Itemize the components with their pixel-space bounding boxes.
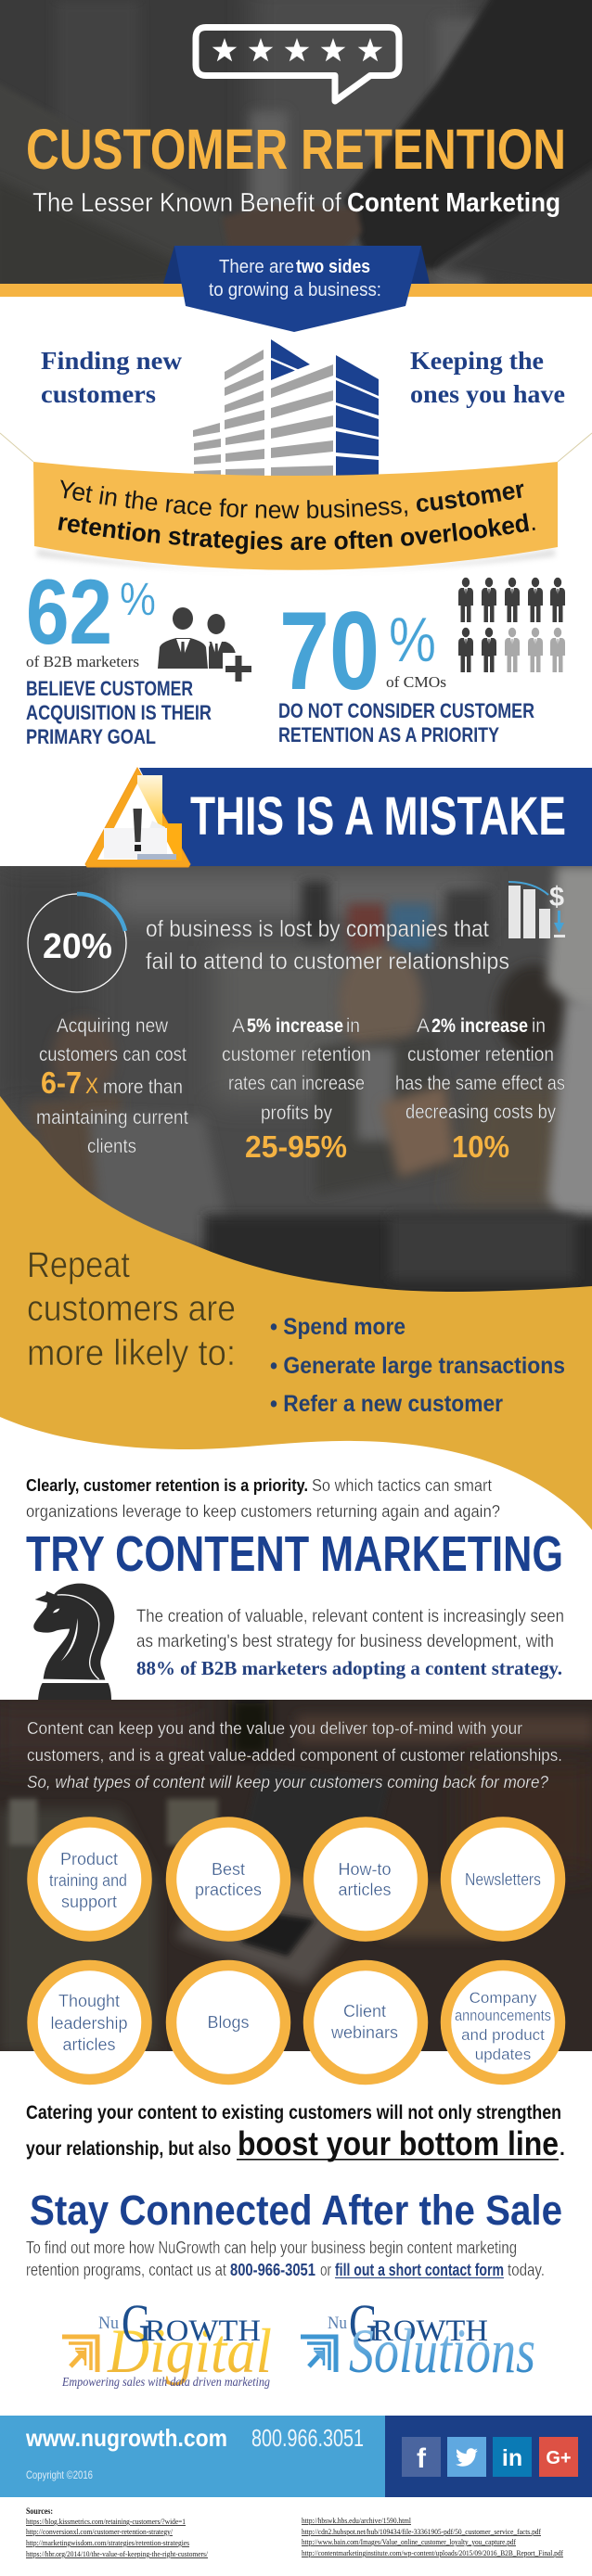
logo: NuGrowth Digital (61, 2293, 272, 2390)
logo: NuGrowth Digital: G (122, 2293, 151, 2353)
content type: how-to articles: articles (338, 1881, 392, 1899)
sources list: Sources: (26, 2506, 53, 2516)
text block: content strategy: 88% of B2B marketers adopting a content strategy. (136, 1657, 562, 1679)
content type: product training and support: Product (60, 1850, 118, 1868)
content type: company announcements: updates (475, 2046, 531, 2063)
text block: acquiring new customers: customers can cost (39, 1044, 187, 1065)
text block: contact details: retention programs, contact us at (26, 2261, 226, 2279)
panel: yellow curved section (0, 1096, 592, 1530)
subtitle: The Lesser Known Benefit of (32, 188, 342, 218)
text block: 5 percent increase: in (346, 1015, 360, 1037)
text block: acquiring new customers: 6-7 (41, 1065, 82, 1100)
sources list: http://conversionxl.com/customer-retention-strategy/ (26, 2527, 174, 2536)
text block: contact details: 800-966-3051 (230, 2261, 315, 2279)
stat: 70 percent: of CMOs (386, 673, 446, 691)
content type: blogs (171, 1966, 286, 2079)
subtitle: Content Marketing (347, 188, 560, 218)
text block: boost your bottom line: . (560, 2138, 565, 2160)
content type: best practices (171, 1822, 286, 1936)
content type: product training and support: support (61, 1893, 117, 1911)
callout: two sides ribbon (163, 246, 430, 332)
content type: product training and support: training and (49, 1871, 127, 1890)
text block: 5 percent increase (222, 1015, 371, 1164)
text block: 5 percent increase: 5% increase (247, 1015, 343, 1037)
content type: client webinars (308, 1966, 423, 2079)
heading: keeping the ones you have (410, 347, 565, 408)
text block: tactics question: Clearly, customer retention is a priority. (26, 1476, 308, 1495)
icon: business people with plus (158, 607, 254, 684)
icon: facebook: f (417, 2443, 427, 2474)
text block: 2 percent increase: has the same effect as (395, 1073, 565, 1094)
icon: declining revenue bars: $ (549, 882, 564, 912)
text block: 5 percent increase: 25-95% (245, 1129, 347, 1164)
icon: linkedin: in (502, 2445, 522, 2471)
stat: 70 percent: RETENTION AS A PRIORITY (278, 723, 499, 746)
heading: keeping the ones you have: Keeping the (410, 347, 544, 375)
stat: 20 percent of business lost (28, 894, 509, 992)
subtitle (32, 188, 560, 218)
icon: chess knight (33, 1584, 114, 1700)
content type: client webinars: webinars (330, 2023, 398, 2042)
heading: finding new customers: customers (41, 380, 156, 408)
content type: company announcements (445, 1966, 560, 2079)
content type: how-to articles (308, 1822, 423, 1936)
icon: warning triangle (85, 768, 190, 867)
text block: boost your bottom line: boost your bottom line (238, 2124, 559, 2162)
icon: google plus: G+ (546, 2448, 572, 2468)
text block: 2 percent increase: A (417, 1015, 430, 1037)
panel: hero header with handshake photo (0, 0, 592, 297)
content type: newsletters (445, 1822, 560, 1936)
sources list: http://marketingwisdom.com/strategies/retention-strategies (26, 2538, 189, 2547)
content type: company announcements: Company (470, 1989, 537, 2007)
logo: NuGrowth Digital: Digital (107, 2315, 272, 2386)
divider band: yellow (0, 284, 592, 297)
content type: product training and support (32, 1822, 147, 1936)
content type: how-to articles: How-to (338, 1860, 392, 1879)
stat: 20 percent of business lost: 20% (43, 927, 112, 966)
banner: this is a mistake (139, 768, 592, 866)
text block: tactics question: organizations leverage to keep customers returning again and again? (26, 1502, 500, 1521)
stat: 20 percent of business lost: of business is lost by companies that (146, 916, 489, 942)
text block: 5 percent increase: profits by (261, 1103, 332, 1124)
content type: thought leadership articles: leadership (50, 2014, 128, 2033)
text block: acquiring new customers (36, 1015, 188, 1157)
logo: NuGrowth Solutions: G (349, 2293, 379, 2353)
text block: 2 percent increase: in (532, 1015, 546, 1037)
text block: 5 percent increase: customer retention (222, 1044, 371, 1065)
sources list: http://www.bain.com/Images/Value_online_customer_loyalty_you_capture.pdf (302, 2537, 516, 2546)
text block: 5 percent increase: rates can increase (228, 1073, 365, 1094)
content type: company announcements: and product (461, 2026, 545, 2044)
text block: 2 percent increase: decreasing costs by (405, 1102, 556, 1123)
footer bar (0, 2416, 592, 2497)
stat: 62 percent: 62 (26, 560, 112, 663)
logo: NuGrowth Digital: ROWTH (145, 2315, 261, 2348)
banner: overlooked retention strategies: retention strategies are often overlooked. (58, 513, 535, 555)
sources list: http://hbswk.hbs.edu/archive/1590.html (302, 2516, 412, 2525)
text block: contact details: fill out a short contact form (335, 2261, 504, 2279)
logo: NuGrowth Solutions (301, 2293, 535, 2386)
content type: best practices: practices (195, 1881, 262, 1899)
text block: 2 percent increase: customer retention (407, 1044, 554, 1065)
icon: linkedin (493, 2437, 532, 2477)
list: repeat customer benefits: • Generate large transactions (270, 1353, 565, 1379)
text block: 2 percent increase: 10% (452, 1129, 509, 1164)
stat: 62 percent: BELIEVE CUSTOMER (26, 677, 193, 700)
heading: finding new customers: Finding new (41, 347, 183, 375)
icon: twitter (447, 2437, 486, 2477)
stat: 62 percent: of B2B marketers (26, 653, 139, 670)
text block: 5 percent increase: A (232, 1015, 245, 1037)
text block: content value intro: So, what types of content will keep your customers coming back for more? (27, 1772, 549, 1792)
banner: overlooked retention strategies: Yet in the race for new business, customer (60, 480, 523, 519)
text block: contact details: or (320, 2261, 331, 2279)
text block: content value intro (27, 1718, 562, 1792)
logo: NuGrowth Solutions: Solutions (349, 2315, 535, 2386)
text block: contact details: today. (508, 2261, 545, 2279)
text block: tactics question (26, 1476, 500, 1521)
heading: repeat customers: more likely to: (27, 1333, 236, 1373)
content type: thought leadership articles: articles (62, 2035, 116, 2054)
logo: NuGrowth Digital: Nu (98, 2314, 119, 2333)
stat: 70 percent: 70 (279, 589, 380, 713)
sources list: https://hbr.org/2014/10/the-value-of-keeping-the-right-customers/ (26, 2549, 209, 2558)
callout: two sides ribbon: two sides (296, 257, 370, 277)
sources list (26, 2506, 563, 2558)
logo: NuGrowth Digital: Empowering sales with data driven marketing (61, 2376, 270, 2390)
icon: review speech bubble with five stars (196, 28, 399, 101)
stat: 62 percent: % (120, 573, 156, 625)
list: repeat customer benefits: • Spend more (270, 1314, 405, 1340)
footer bar: 800.966.3051 (251, 2424, 364, 2452)
text block: 2 percent increase (395, 1015, 565, 1164)
banner: overlooked retention strategies (0, 432, 592, 592)
heading: keeping the ones you have: ones you have (410, 380, 565, 408)
text block: tactics question: So which tactics can smart (312, 1476, 492, 1495)
icon: office building (193, 339, 379, 478)
text block: acquiring new customers: more than (103, 1077, 183, 1098)
logo: NuGrowth Solutions: Nu (328, 2314, 347, 2333)
content type: newsletters: Newsletters (465, 1870, 541, 1889)
content type: blogs: Blogs (207, 2013, 250, 2032)
content type: client webinars: Client (343, 2002, 386, 2021)
sources list: https://blog.kissmetrics.com/retaining-customers/?wide=1 (26, 2517, 186, 2526)
callout: two sides ribbon: to growing a business: (209, 280, 381, 300)
text block: content value intro: Content can keep you and the value you deliver top-of-mind with your (27, 1718, 522, 1738)
heading: repeat customers (27, 1245, 236, 1373)
icon: ten people, seven dark (458, 578, 565, 672)
stat: 62 percent (26, 560, 254, 748)
heading: repeat customers: customers are (27, 1289, 236, 1329)
list: repeat customer benefits (270, 1314, 565, 1417)
text block: acquiring new customers: X (85, 1074, 98, 1099)
logo: NuGrowth Solutions: ROWTH (372, 2315, 488, 2348)
stat: 70 percent: % (389, 605, 436, 675)
content type: company announcements: announcements (455, 2007, 551, 2024)
text block: content value intro: customers, and is a great value-added component of customer relationships. (27, 1745, 562, 1765)
callout: two sides ribbon: There are (219, 257, 294, 277)
icon: google plus (539, 2437, 578, 2477)
stat: 62 percent: ACQUISITION IS THEIR (26, 701, 212, 724)
text block: acquiring new customers: Acquiring new (57, 1015, 169, 1037)
heading: repeat customers: Repeat (27, 1245, 130, 1285)
heading: finding new customers (41, 347, 183, 408)
icon: facebook (402, 2437, 441, 2477)
panel: desk photo section (0, 1700, 592, 2051)
stat: 20 percent of business lost: fail to attend to customer relationships (146, 949, 509, 975)
sources list: http://cdn2.hubspot.net/hub/109434/file-33361905-pdf/50_customer_service_facts.pdf (302, 2527, 541, 2536)
list: repeat customer benefits: • Refer a new customer (270, 1391, 503, 1417)
text block: 2 percent increase: 2% increase (431, 1015, 528, 1037)
icon: declining revenue bars (508, 882, 565, 938)
text block: boost your bottom line: your relationship, but also (26, 2138, 231, 2160)
footer bar: Copyright ©2016 (26, 2468, 93, 2481)
panel: office handshake photo with statistics background (0, 866, 592, 1307)
text block: boost your bottom line (26, 2102, 565, 2162)
text block: acquiring new customers: clients (87, 1136, 136, 1157)
content type: thought leadership articles: Thought (58, 1992, 120, 2010)
content type: thought leadership articles (32, 1966, 147, 2079)
text block: acquiring new customers: maintaining current (36, 1107, 188, 1129)
footer bar: www.nugrowth.com (25, 2424, 227, 2452)
text block: contact details (26, 2238, 545, 2279)
stat: 70 percent: DO NOT CONSIDER CUSTOMER (278, 699, 534, 722)
stat: 70 percent (278, 578, 565, 746)
stat: 62 percent: PRIMARY GOAL (26, 725, 156, 748)
content type: best practices: Best (212, 1860, 245, 1879)
text block: content strategy (136, 1606, 564, 1679)
